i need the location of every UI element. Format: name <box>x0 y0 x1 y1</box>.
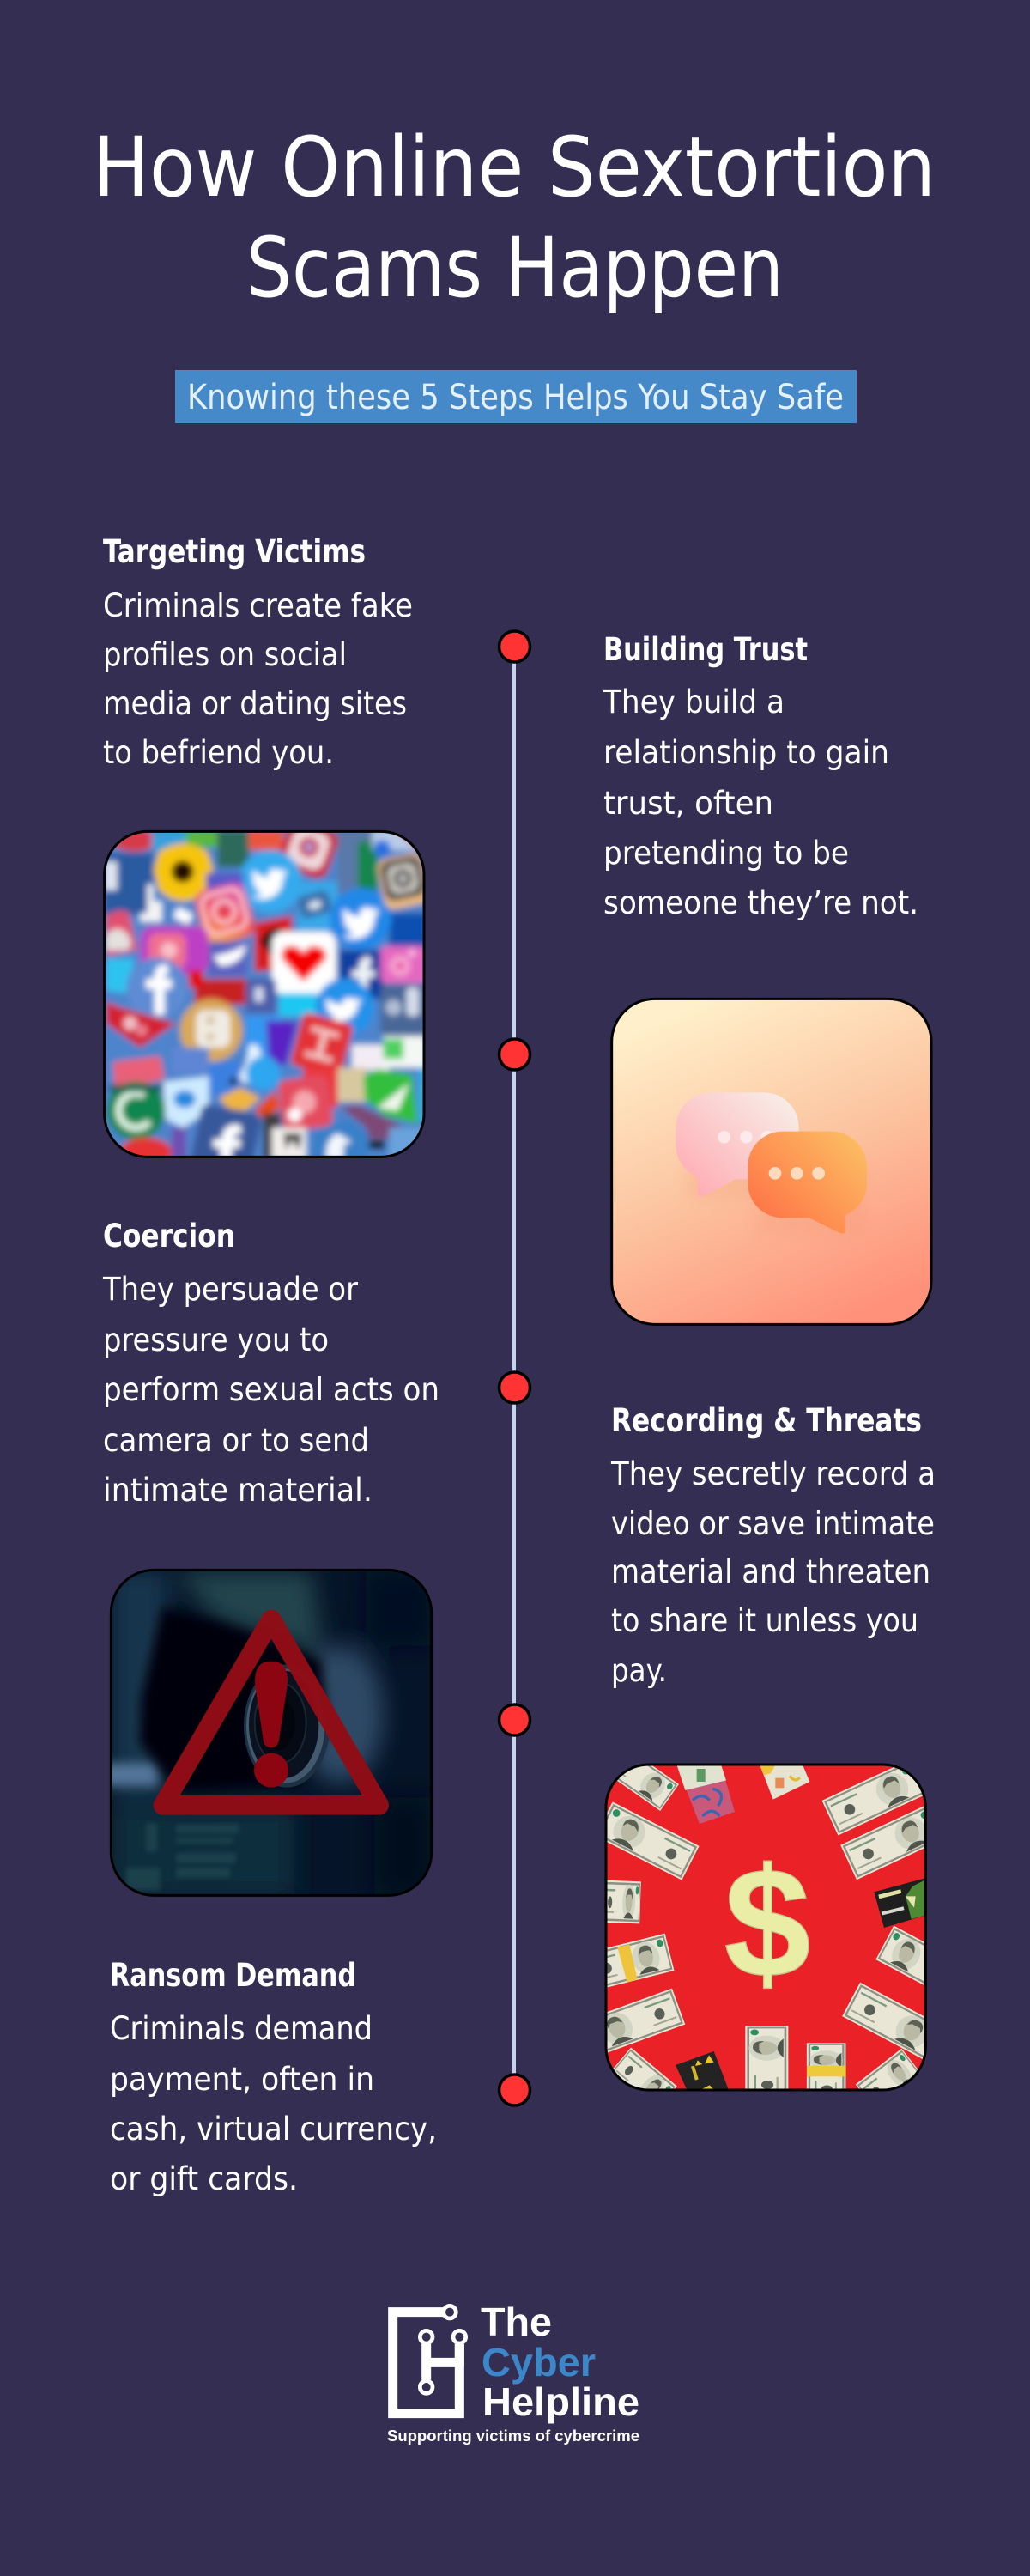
red arrow icon <box>106 1002 176 1048</box>
center mix <box>242 1013 282 1058</box>
logo wordmark: Supporting victims of cybercrime <box>387 2427 639 2445</box>
bottom row <box>120 1138 172 1166</box>
step: building trust: They build a <box>603 683 785 720</box>
step: recording and threats <box>610 1402 936 1689</box>
step: targeting victims: media or dating sites <box>103 685 407 722</box>
step: coercion: intimate material. <box>103 1472 373 1509</box>
timeline <box>500 631 530 2105</box>
paper band 2 <box>807 2066 846 2076</box>
step: coercion <box>102 1218 439 1509</box>
image: chat bubbles <box>612 999 931 1324</box>
step: recording and threats: to share it unless you <box>611 1602 918 1639</box>
step: coercion: perform sexual acts on <box>103 1371 439 1408</box>
pink gift card <box>676 1765 735 1824</box>
banknotes <box>608 1765 924 2092</box>
image: hidden camera with warning triangle <box>103 1570 432 1898</box>
step: recording and threats: pay. <box>611 1652 667 1689</box>
bitcoin <box>179 999 243 1062</box>
step: building trust: someone they’re not. <box>603 884 918 921</box>
timeline dot 4 <box>500 1704 530 1735</box>
red and black icon <box>255 916 292 972</box>
step: building trust: relationship to gain <box>603 734 889 771</box>
step: ransom demand: or gift cards. <box>110 2160 298 2197</box>
twitter light <box>163 1076 209 1127</box>
bubble shadows <box>692 1175 773 1221</box>
step: coercion: pressure you to <box>103 1321 329 1358</box>
faint printed label <box>126 1823 239 1891</box>
timeline dot 1 <box>500 631 530 662</box>
logo wordmark: The <box>481 2300 552 2344</box>
sunflower <box>154 843 213 902</box>
image: social media icons collage <box>103 829 426 1158</box>
slate icon <box>246 979 276 1013</box>
step: targeting victims: profiles on social <box>103 636 347 673</box>
step: targeting victims: Targeting Victims <box>103 533 366 570</box>
orange speech bubble <box>748 1132 867 1234</box>
cream gift card <box>760 1765 809 1800</box>
dollar sign: $ <box>724 1837 811 2010</box>
black gift card <box>874 1878 927 1928</box>
instagram purple <box>140 926 209 975</box>
step: targeting victims: Criminals create fake <box>103 587 413 624</box>
step: building trust <box>603 631 918 921</box>
step: building trust: Building Trust <box>603 631 808 668</box>
black card bottom <box>676 2051 728 2088</box>
green C <box>106 1081 165 1139</box>
step: recording and threats: Recording & Threats <box>611 1402 922 1439</box>
logo wordmark <box>387 2300 639 2445</box>
facebook circle <box>195 979 246 1005</box>
step: recording and threats: material and threaten <box>611 1553 930 1590</box>
step: ransom demand <box>110 1957 437 2197</box>
step: coercion: camera or to send <box>103 1422 369 1459</box>
green tile <box>363 1069 418 1123</box>
timeline dot 3 <box>500 1372 530 1403</box>
logo: The Cyber Helpline <box>387 2300 639 2445</box>
logo mark <box>393 2306 466 2414</box>
step: ransom demand: Ransom Demand <box>110 1957 356 1994</box>
red pink tile <box>303 1067 337 1108</box>
step: building trust: pretending to be <box>603 835 849 872</box>
step: targeting victims: to befriend you. <box>103 734 334 771</box>
timeline dot 2 <box>500 1039 530 1070</box>
pink icon <box>380 946 427 983</box>
pink speech bubble <box>676 1092 799 1197</box>
camera lens <box>244 1664 330 1788</box>
orange <box>219 1088 260 1110</box>
step: ransom demand: payment, often in <box>110 2061 374 2098</box>
step: coercion: Coercion <box>103 1218 235 1255</box>
twitter 3 <box>316 978 374 1036</box>
title: How Online Sextortion <box>93 119 936 216</box>
heart tile <box>272 932 336 994</box>
title <box>93 119 936 316</box>
logo wordmark: Cyber <box>482 2340 596 2385</box>
twitter 1 <box>239 850 302 913</box>
red Z tile <box>290 1012 354 1078</box>
step: ransom demand: Criminals demand <box>110 2010 373 2047</box>
twitter 2 <box>389 913 427 951</box>
image: money and gift cards <box>604 1764 927 2092</box>
bright blur on left <box>103 1763 157 1786</box>
step: building trust: trust, often <box>603 785 773 822</box>
camera body <box>140 1607 329 1792</box>
timeline dot 5 <box>500 2075 530 2105</box>
paper band 1 <box>617 1944 638 1983</box>
subtitle banner: Knowing these 5 Steps Helps You Stay Safe <box>187 378 844 417</box>
step: coercion: They persuade or <box>102 1271 358 1308</box>
instagram red <box>277 833 342 884</box>
step: targeting victims <box>103 533 413 771</box>
instagram gray <box>376 851 431 911</box>
step: recording and threats: video or save intimate <box>611 1505 935 1542</box>
title: Scams Happen <box>246 220 784 316</box>
warning triangle <box>163 1619 379 1805</box>
step: ransom demand: cash, virtual currency, <box>110 2111 437 2148</box>
logo wordmark: Helpline <box>482 2379 639 2424</box>
instagram pink orange <box>206 873 243 890</box>
step: recording and threats: They secretly record a <box>610 1455 936 1492</box>
